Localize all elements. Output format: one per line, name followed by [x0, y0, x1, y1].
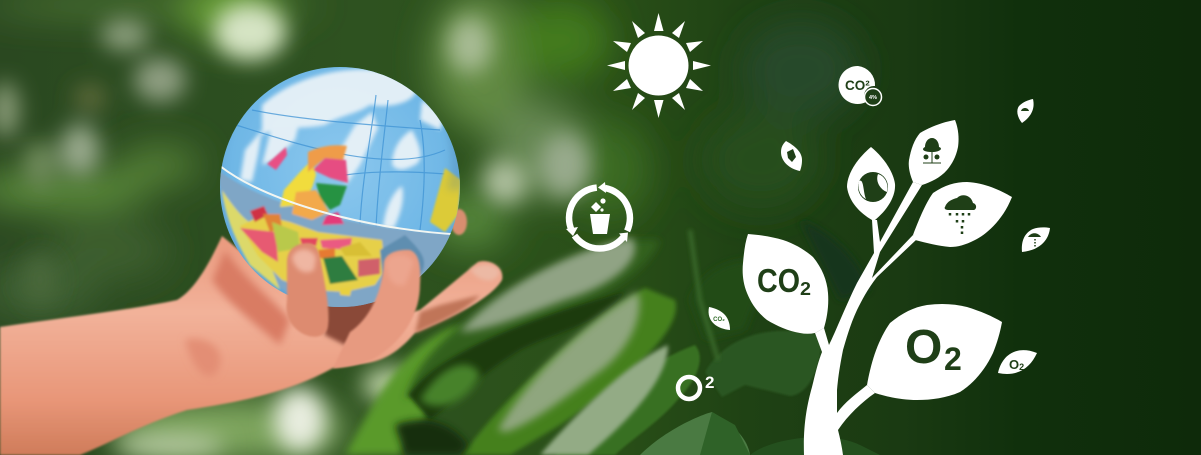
small leaf: CO2 — [709, 307, 730, 330]
small leaf: rain cloud — [1022, 227, 1050, 252]
tree trunk and branches — [804, 182, 922, 455]
background leaves — [345, 220, 880, 455]
small leaf: O2 — [998, 350, 1037, 374]
O2 label: 2 — [705, 373, 714, 392]
globe: meridians — [236, 95, 446, 230]
leaf: O2 — [867, 304, 1002, 400]
tree — [743, 120, 1012, 455]
leaf: O2: O — [905, 321, 942, 374]
icon: recycling bin — [566, 182, 630, 249]
CO2 bubble icon — [839, 66, 882, 106]
leaf: tree — [909, 120, 959, 185]
globe: Africa and lower section — [218, 145, 470, 312]
small leaf: O2: 2 — [1019, 362, 1024, 372]
small leaf: O2: O — [1009, 357, 1019, 372]
hand: fingers in front of globe — [286, 243, 420, 368]
O2 label — [678, 373, 714, 399]
globe: equator band — [220, 166, 470, 235]
globe — [218, 67, 470, 312]
leaf: O2: 2 — [944, 341, 962, 377]
leaf: CO2: CO — [757, 262, 800, 299]
hand: arm and palm behind globe — [0, 209, 502, 455]
leaf: earth — [847, 147, 895, 220]
CO2 bubble icon: CO² — [845, 78, 870, 93]
leaf: CO2: 2 — [800, 279, 811, 299]
small leaf: earth — [781, 141, 802, 171]
small leaf: CO2: CO₂ — [713, 317, 725, 323]
leaf: CO2 — [743, 234, 828, 334]
icon: sun — [607, 13, 711, 118]
globe: clouds and ice — [240, 69, 445, 228]
leaf: rain cloud — [913, 182, 1012, 247]
small leaf: upper right — [1017, 99, 1034, 123]
CO2 bubble icon: 4% — [869, 95, 877, 101]
